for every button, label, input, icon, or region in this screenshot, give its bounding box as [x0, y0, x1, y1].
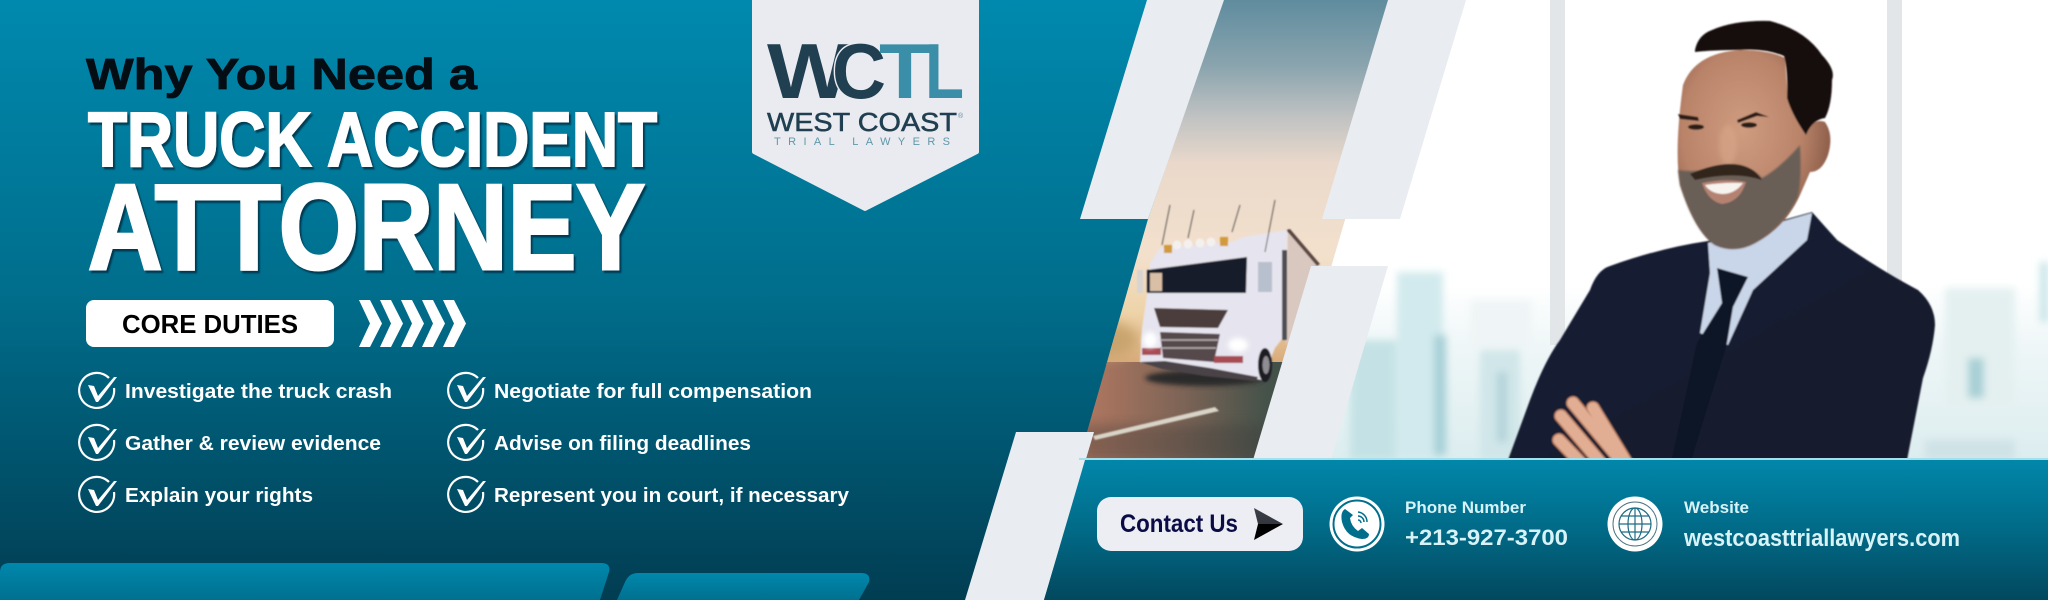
duty: explain rights: Explain your rights	[125, 485, 313, 507]
suit	[1508, 212, 1935, 460]
road	[1086, 362, 1282, 458]
duty: gather evidence: Gather & review evidence	[125, 433, 381, 455]
truck photo strip	[1086, 0, 1388, 458]
duty: represent in court: Represent you in court, if necessary	[494, 485, 850, 507]
logo tagline: TRIAL LAWYERS	[774, 136, 950, 148]
website text: westcoasttriallawyers.com	[1683, 525, 1960, 552]
logo mark: T	[879, 27, 931, 115]
duty: advise deadlines	[448, 425, 751, 460]
website text: Website	[1684, 498, 1749, 517]
logo mark	[767, 27, 964, 115]
duty: negotiate: Negotiate for full compensation	[494, 381, 812, 403]
logo wordmark: WEST COAST	[767, 107, 957, 137]
logo badge	[754, 0, 977, 209]
truck	[1137, 200, 1320, 386]
moustache	[1690, 164, 1762, 180]
bottom contact panel	[1044, 458, 2048, 600]
window backdrop	[1331, 0, 2048, 458]
lapel	[1682, 213, 1837, 460]
title: Why You Need a	[86, 50, 478, 99]
title	[86, 50, 657, 295]
chevron arrows	[359, 300, 466, 347]
website text	[1683, 498, 1960, 552]
phone text	[1405, 498, 1568, 550]
logo badge: ®	[958, 112, 964, 120]
duty: explain rights	[79, 477, 313, 512]
duty: advise deadlines: Advise on filing deadlines	[494, 433, 751, 455]
icon: globe	[1608, 496, 1662, 552]
phone text: Phone Number	[1405, 498, 1526, 517]
duty: gather evidence	[79, 425, 381, 460]
duty: investigate: Investigate the truck crash	[125, 381, 392, 403]
eyes and brows	[1678, 112, 1769, 123]
contact button: Contact Us	[1120, 510, 1238, 538]
hair	[1695, 21, 1833, 135]
bottom tab shapes	[0, 563, 869, 600]
portrait of attorney	[1508, 21, 1935, 462]
light slanted stripes	[965, 0, 1466, 600]
logo mark: C	[832, 27, 886, 115]
core duties pill: CORE DUTIES	[122, 309, 298, 339]
duty: represent in court	[448, 477, 850, 512]
shirt collar	[1700, 213, 1812, 345]
duty: negotiate	[448, 373, 812, 408]
face	[1678, 50, 1830, 249]
necktie	[1672, 268, 1748, 458]
title: ATTORNEY	[88, 159, 645, 295]
contact button	[1097, 497, 1303, 551]
icon: phone	[1330, 496, 1384, 552]
logo mark: W	[767, 27, 851, 115]
title: TRUCK ACCIDENT	[88, 97, 657, 183]
phone text: +213-927-3700	[1405, 525, 1568, 550]
beard	[1678, 145, 1801, 249]
logo mark: L	[925, 27, 964, 115]
crossed hand	[1559, 403, 1626, 462]
mouth	[1702, 180, 1746, 204]
duty: investigate	[79, 373, 392, 408]
duties list	[79, 373, 850, 512]
core duties pill	[86, 300, 334, 347]
